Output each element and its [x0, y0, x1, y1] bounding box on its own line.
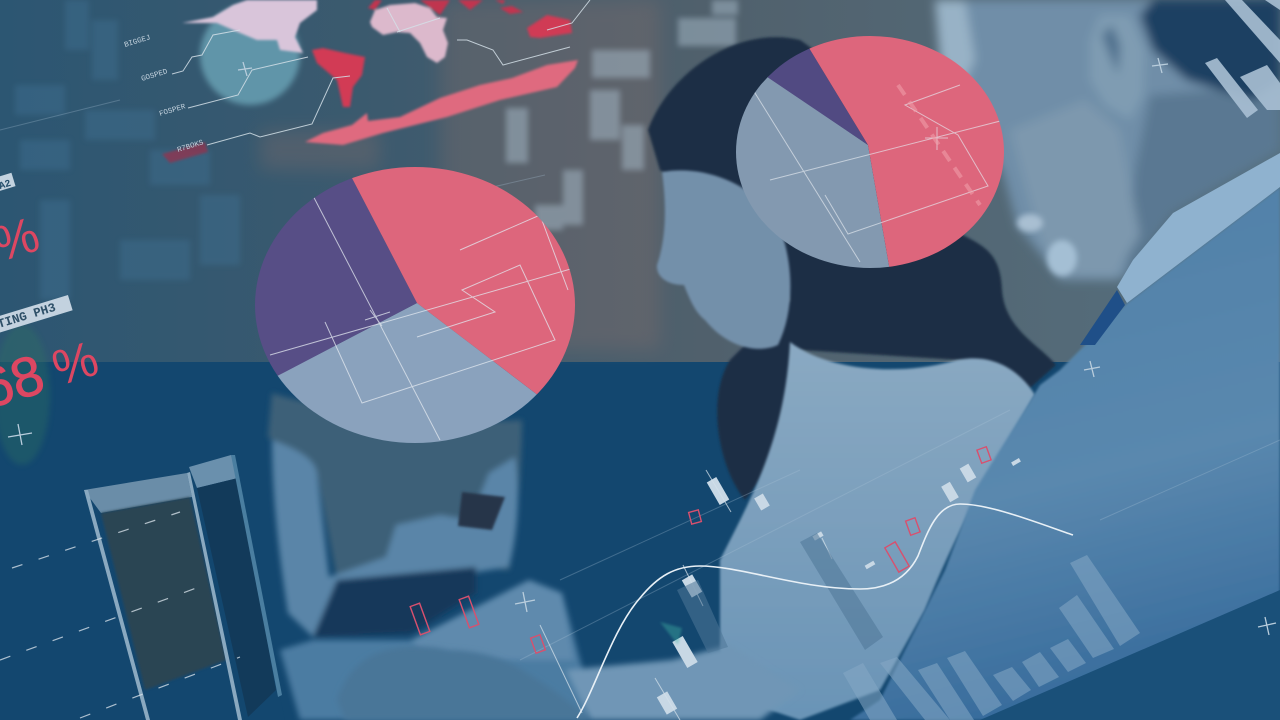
trend line — [577, 504, 1073, 718]
tag: A2 — [0, 173, 16, 194]
dashed laptop lines — [0, 512, 240, 718]
top-right chart fragment — [1205, 0, 1280, 118]
map: Australia — [527, 15, 572, 38]
slice: purple — [255, 178, 417, 376]
map connector lines — [172, 0, 590, 145]
map: Africa — [370, 3, 448, 63]
green plant blur — [0, 325, 50, 465]
tag: TING PH3 — [0, 295, 73, 333]
phone — [458, 492, 505, 530]
front woman — [337, 37, 1056, 720]
diagonal grid lines — [0, 100, 1280, 660]
map labels: FOSPER — [159, 103, 187, 119]
map: South America — [312, 48, 365, 107]
pie chart: left — [255, 167, 575, 443]
plus markers — [8, 58, 1276, 635]
back woman — [268, 393, 590, 720]
pie chart: right — [736, 36, 1004, 268]
slice: purple — [768, 48, 868, 144]
map: North America — [182, 0, 317, 53]
man — [850, 0, 1280, 720]
slice: red — [809, 36, 1004, 267]
bar chart — [677, 533, 1140, 720]
wall — [0, 0, 1280, 362]
map: elongated landmass — [305, 60, 578, 145]
slice: grey — [278, 303, 537, 443]
slice: red — [352, 167, 575, 394]
laptop — [84, 455, 285, 720]
map labels — [124, 34, 205, 155]
left stats — [0, 173, 105, 465]
map labels: GOSPED — [141, 68, 169, 84]
map: dark red strip — [162, 142, 208, 163]
map labels: R7BOKS — [177, 139, 205, 155]
candlesticks — [410, 447, 1021, 720]
sleeve and hand — [566, 645, 800, 720]
head — [935, 0, 1280, 280]
world map — [162, 0, 578, 163]
map labels: BIGGEJ — [124, 34, 152, 50]
slice: grey — [736, 77, 890, 268]
left stats: % — [46, 330, 105, 397]
map: Europe and Asia pieces — [368, 0, 523, 15]
